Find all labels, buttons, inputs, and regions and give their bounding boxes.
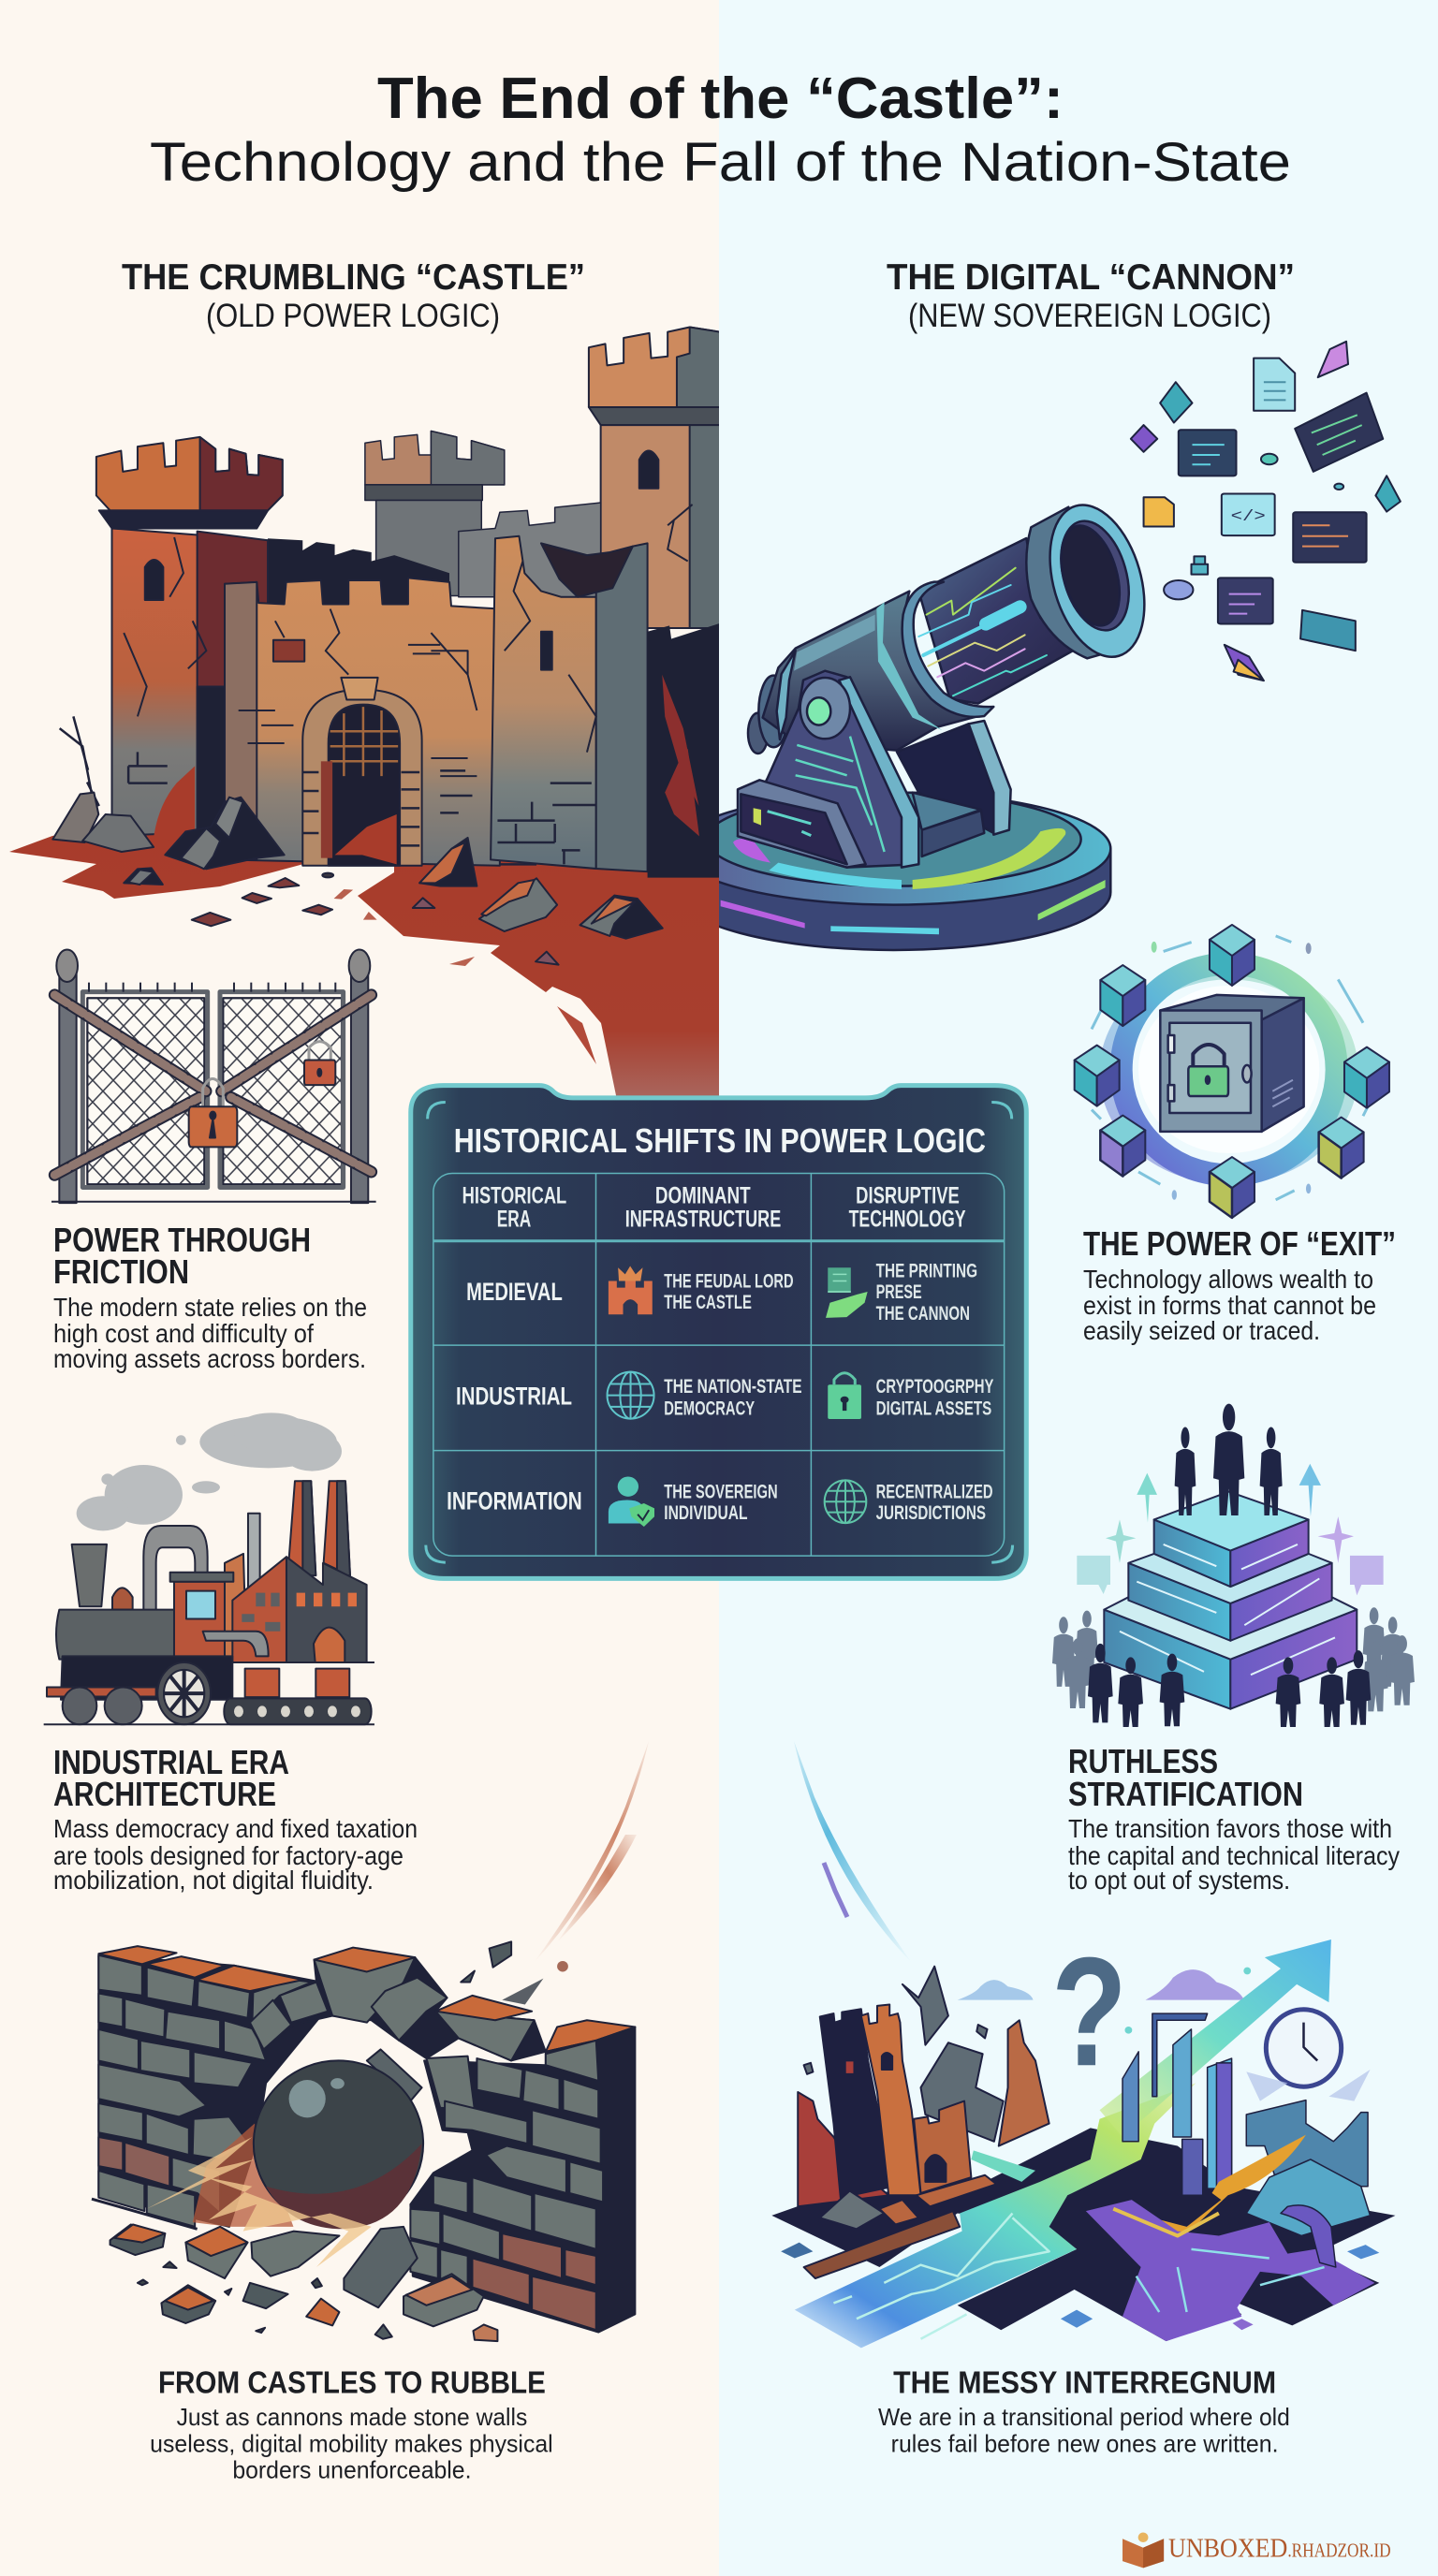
heading: the digital cannon bbox=[887, 257, 1295, 334]
rubble bbox=[110, 2224, 497, 2341]
logo: unboxed.rhadzor.id: .RHADZOR.ID bbox=[1287, 2539, 1391, 2561]
table cell text: DEMOCRACY bbox=[664, 1398, 755, 1420]
arch orange tops bbox=[315, 1948, 635, 2052]
text block: industrial era architecture bbox=[53, 1743, 418, 1895]
barrel tube bbox=[918, 538, 1073, 704]
heading: the crumbling castle: (OLD POWER LOGIC) bbox=[206, 298, 500, 334]
illustration: crumbling castle bbox=[60, 328, 720, 878]
dark platform bbox=[771, 2128, 1395, 2341]
table cell text: CRYPTOOGRPHY bbox=[876, 1376, 993, 1398]
back right tower bbox=[589, 328, 720, 628]
barrel circuit lines bbox=[918, 568, 1047, 695]
ruined castle bbox=[798, 1967, 1049, 2278]
text block: from castles to rubble: FROM CASTLES TO RUBBLE bbox=[158, 2365, 546, 2400]
table cell text: THE SOVEREIGN bbox=[664, 1481, 778, 1503]
illustration: vault and data cubes bbox=[1075, 925, 1389, 1218]
icon: globe green bbox=[825, 1480, 866, 1523]
illustration: flying data fragments: </> bbox=[1231, 508, 1266, 526]
table cell text: PRESE bbox=[876, 1281, 922, 1303]
cannonball bbox=[254, 2049, 423, 2229]
table cell text bbox=[664, 1260, 993, 1524]
rising arrow bbox=[1100, 1939, 1331, 2137]
table column headers: DOMINANT bbox=[655, 1182, 751, 1208]
red stains on the castle base bbox=[154, 749, 699, 864]
orange fissure bbox=[1113, 2135, 1306, 2238]
panel: historical shifts table bbox=[411, 1086, 1026, 1578]
impact sparks bbox=[147, 2137, 372, 2267]
text block: power through friction: The modern state relies on the bbox=[53, 1293, 367, 1322]
text block: industrial era architecture: are tools designed for factory-age bbox=[53, 1841, 404, 1870]
table grid bbox=[433, 1174, 1005, 1556]
table column headers: DISRUPTIVE bbox=[856, 1182, 960, 1208]
smoke clouds bbox=[77, 1412, 342, 1530]
swirling ring bbox=[1092, 936, 1370, 1200]
steam train bbox=[47, 1526, 269, 1724]
text block: the power of exit: Technology allows wealth to bbox=[1083, 1265, 1373, 1294]
table column headers: INFRASTRUCTURE bbox=[625, 1206, 781, 1232]
text block: ruthless stratification bbox=[1068, 1742, 1400, 1895]
conveyor belt bbox=[44, 1662, 374, 1724]
barrel rear bbox=[748, 592, 984, 754]
text block: from castles to rubble: borders unenforceable. bbox=[232, 2456, 472, 2483]
panel title: HISTORICAL SHIFTS IN POWER LOGIC bbox=[454, 1121, 986, 1160]
right wall bbox=[410, 2027, 635, 2333]
title bbox=[150, 66, 1291, 193]
text block: power through friction: high cost and difficulty of bbox=[53, 1319, 314, 1348]
text block: ruthless stratification: STRATIFICATION bbox=[1068, 1775, 1303, 1813]
ruined arch bbox=[1281, 2205, 1336, 2267]
icon: printing press and cannon bbox=[826, 1267, 868, 1318]
illustration: red cracked ground bbox=[9, 824, 719, 1100]
data stream bbox=[795, 2083, 1196, 2348]
text block: power through friction: POWER THROUGH bbox=[53, 1221, 311, 1259]
illustration: digital cannon bbox=[677, 494, 1161, 950]
vault bbox=[1160, 995, 1304, 1132]
wall orange tops bbox=[98, 1946, 302, 1991]
text block: industrial era architecture: mobilization, not digital fluidity. bbox=[53, 1866, 374, 1895]
heading: the crumbling castle: THE CRUMBLING “CASTLE” bbox=[122, 257, 585, 298]
decorative arrows and speech bubbles bbox=[1077, 1464, 1384, 1595]
foreground crowd bbox=[1088, 1644, 1371, 1727]
table cell text: THE CANNON bbox=[876, 1302, 970, 1325]
panel frame bbox=[411, 1086, 1026, 1578]
factory bbox=[225, 1481, 367, 1662]
text block: power through friction: FRICTION bbox=[53, 1252, 189, 1291]
data cubes bbox=[1075, 925, 1389, 1218]
logo: unboxed.rhadzor.id bbox=[1123, 2532, 1391, 2568]
illustration: stratified pyramid with people bbox=[1052, 1404, 1415, 1727]
text block: ruthless stratification: to opt out of systems. bbox=[1068, 1866, 1290, 1895]
text block: the messy interregnum: THE MESSY INTERREGNUM bbox=[893, 2365, 1276, 2400]
illustration: messy interregnum bbox=[771, 1926, 1395, 2348]
table cell text: JURISDICTIONS bbox=[876, 1502, 986, 1524]
question mark: ? bbox=[1051, 1926, 1127, 2099]
text block: from castles to rubble: Just as cannons made stone walls bbox=[177, 2403, 527, 2431]
text block: the power of exit: exist in forms that cannot be bbox=[1083, 1291, 1376, 1320]
text block: industrial era architecture: Mass democracy and fixed taxation bbox=[53, 1814, 418, 1843]
base disk bbox=[677, 793, 1110, 950]
text block: from castles to rubble bbox=[150, 2365, 553, 2483]
text block: the power of exit: easily seized or traced. bbox=[1083, 1316, 1320, 1345]
chains bbox=[54, 995, 372, 1175]
icon: padlock bbox=[828, 1373, 861, 1419]
text block: industrial era architecture: ARCHITECTURE bbox=[53, 1775, 276, 1813]
fence panels bbox=[82, 983, 344, 1188]
icon: sovereign individual bbox=[609, 1476, 654, 1527]
pyramid tiers bbox=[1104, 1492, 1357, 1709]
table column headers bbox=[462, 1182, 966, 1232]
background crowd bbox=[1052, 1607, 1415, 1711]
table cell text: THE FEUDAL LORD bbox=[664, 1270, 794, 1293]
title: Technology and the Fall of the Nation-State bbox=[150, 132, 1291, 193]
table cell text: DIGITAL ASSETS bbox=[876, 1398, 991, 1420]
fence posts bbox=[51, 949, 376, 1203]
table column headers: TECHNOLOGY bbox=[849, 1206, 966, 1232]
table row labels bbox=[447, 1279, 582, 1515]
illustration: cannonball through wall bbox=[92, 1941, 635, 2341]
text block: ruthless stratification: The transition favors those with bbox=[1068, 1814, 1392, 1843]
table cell text: THE PRINTING bbox=[876, 1260, 977, 1282]
table row labels: MEDIEVAL bbox=[466, 1279, 563, 1306]
illustration: flying data fragments bbox=[1131, 342, 1401, 681]
broken right tower bbox=[491, 536, 648, 871]
dark wall bbox=[648, 623, 720, 878]
corner brackets bbox=[426, 1102, 1013, 1562]
text block: ruthless stratification: RUTHLESS bbox=[1068, 1742, 1218, 1780]
illustration: rocks and rubble bbox=[52, 749, 699, 965]
muzzle bbox=[1025, 504, 1146, 660]
padlocks bbox=[189, 1042, 335, 1147]
text block: the messy interregnum bbox=[878, 2365, 1290, 2458]
purple circuit ground bbox=[1086, 2200, 1374, 2341]
arch stones bbox=[250, 1957, 546, 2060]
table cell text: THE CASTLE bbox=[664, 1291, 752, 1313]
illustration: chained gate bbox=[51, 949, 376, 1203]
right support leg bbox=[969, 721, 1011, 835]
top three figures bbox=[1175, 1404, 1283, 1515]
table cell text: THE NATION-STATE bbox=[664, 1376, 802, 1398]
digital buildings bbox=[1123, 2013, 1371, 2235]
heading: the digital cannon: (NEW SOVEREIGN LOGIC) bbox=[908, 298, 1271, 334]
text block: from castles to rubble: useless, digital mobility makes physical bbox=[150, 2430, 553, 2458]
gate bbox=[302, 678, 422, 866]
support step bbox=[913, 793, 984, 856]
heading: the crumbling castle bbox=[122, 257, 585, 334]
back middle tower bbox=[365, 431, 601, 597]
text block: ruthless stratification: the capital and technical literacy bbox=[1068, 1841, 1400, 1870]
left tower bbox=[96, 437, 283, 836]
table cell text: RECENTRALIZED bbox=[876, 1481, 993, 1503]
left support arm bbox=[738, 671, 918, 868]
barrel collar bbox=[902, 582, 993, 717]
icon: castle bbox=[609, 1266, 653, 1314]
swoosh: left debris trail bbox=[534, 1741, 649, 1963]
text block: power through friction: moving assets across borders. bbox=[53, 1344, 366, 1373]
main wall bbox=[225, 578, 500, 866]
dark support interior bbox=[897, 724, 993, 833]
icon: globe bbox=[608, 1372, 654, 1419]
text block: the power of exit bbox=[1083, 1224, 1396, 1345]
text block: industrial era architecture: INDUSTRIAL ERA bbox=[53, 1743, 289, 1781]
logo: unboxed.rhadzor.id: UNBOXED bbox=[1168, 2534, 1287, 2563]
clouds bbox=[958, 1969, 1244, 2000]
text block: power through friction bbox=[53, 1221, 367, 1373]
title: The End of the “Castle”: bbox=[377, 66, 1064, 131]
swoosh: right debris trail bbox=[794, 1741, 912, 1963]
clock bbox=[1266, 2010, 1342, 2086]
control box bbox=[738, 780, 866, 868]
left wall bbox=[92, 1955, 321, 2229]
table row labels: INDUSTRIAL bbox=[456, 1383, 572, 1411]
heading: the digital cannon: THE DIGITAL “CANNON” bbox=[887, 257, 1295, 298]
table column headers: ERA bbox=[497, 1206, 531, 1232]
floating tiles bbox=[781, 1968, 1379, 2330]
text block: the messy interregnum: rules fail before new ones are written. bbox=[891, 2430, 1279, 2458]
brick and stone mortar lines bbox=[128, 752, 596, 864]
text block: the messy interregnum: We are in a transitional period where old bbox=[878, 2403, 1290, 2431]
table cell text: INDIVIDUAL bbox=[664, 1502, 748, 1524]
debris bbox=[461, 1941, 568, 2004]
illustration: industrial train and factory bbox=[44, 1412, 374, 1724]
table column headers: HISTORICAL bbox=[462, 1182, 566, 1208]
dark rear battlement bbox=[268, 538, 449, 603]
table row labels: INFORMATION bbox=[447, 1487, 582, 1515]
